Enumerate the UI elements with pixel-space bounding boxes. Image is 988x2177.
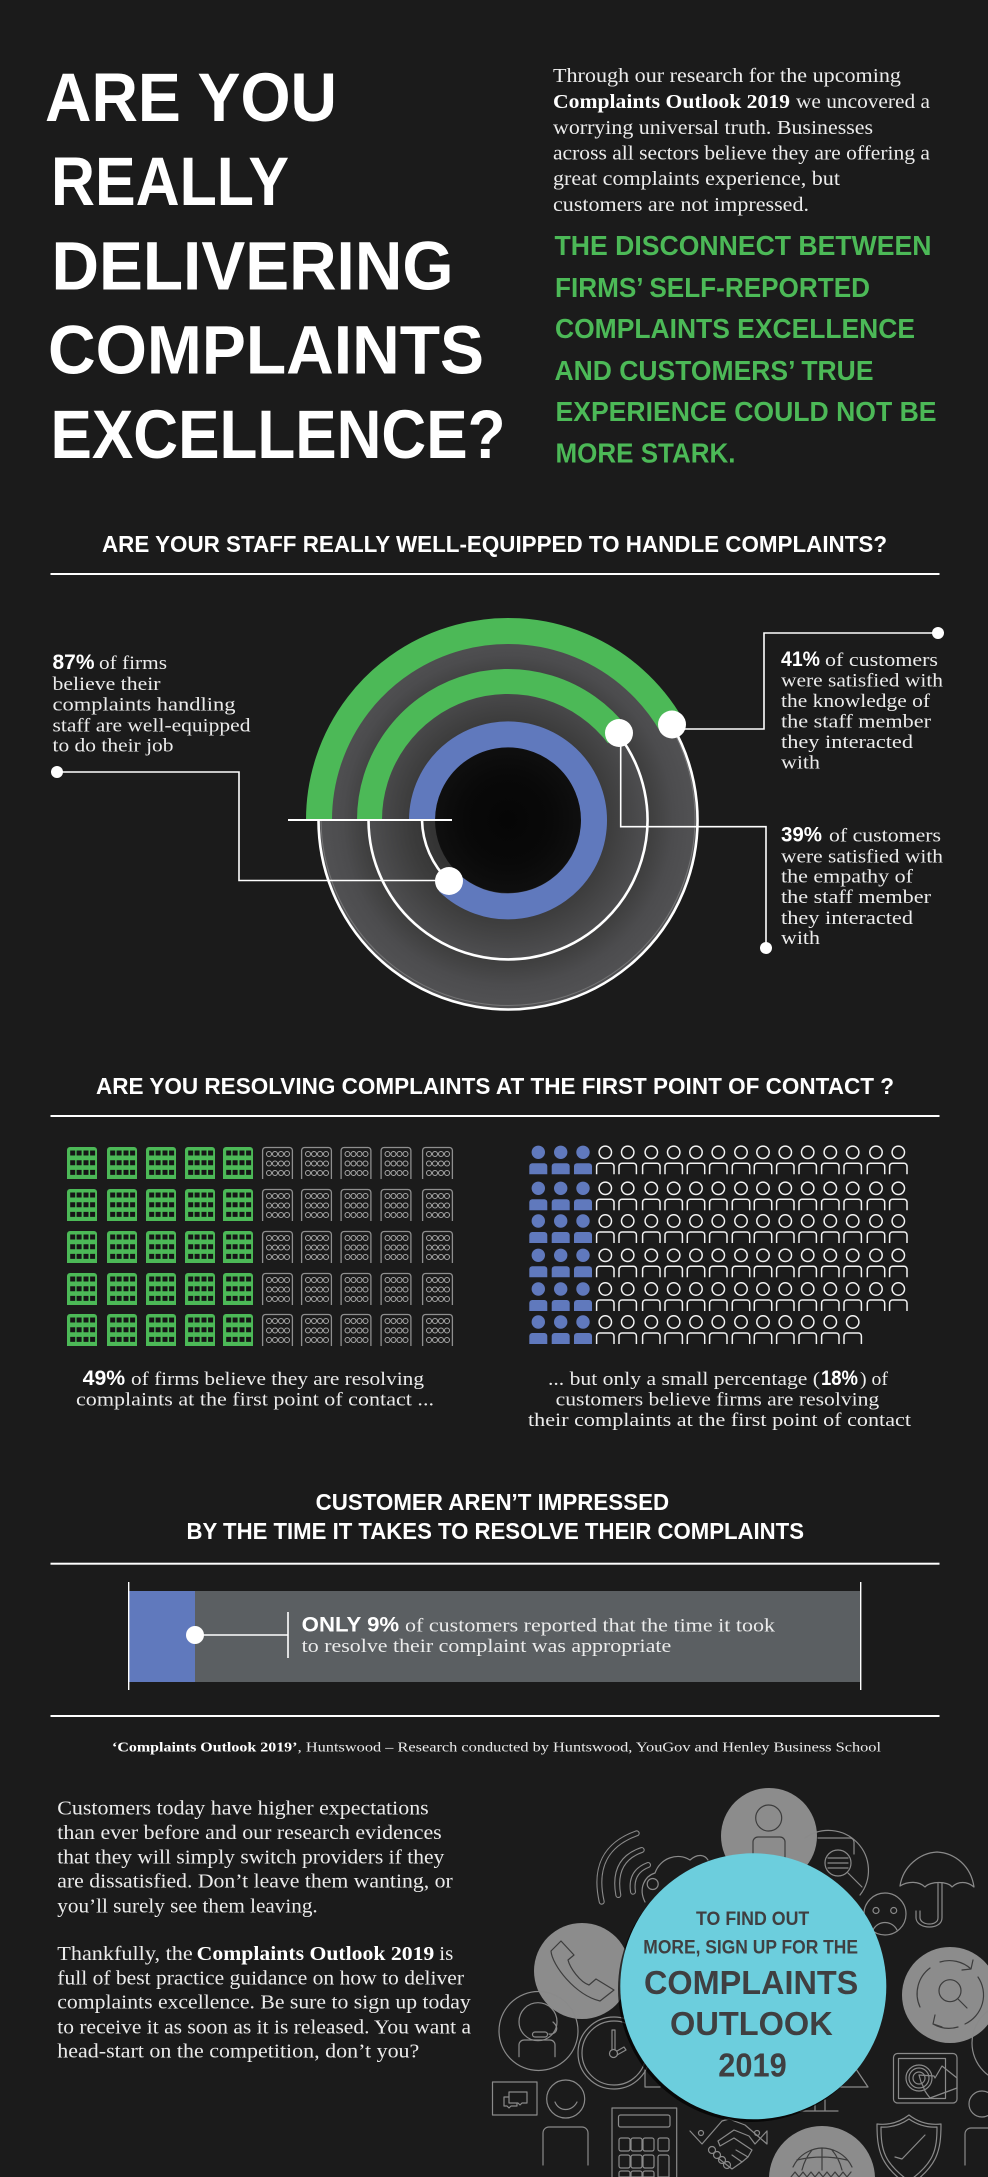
green arc: knowledge 41% bbox=[319, 631, 672, 820]
caption: 49% of firms: of firms believe they are resolving bbox=[131, 1369, 425, 1390]
green buildings bbox=[67, 1147, 253, 1346]
intro paragraph bbox=[553, 65, 930, 216]
icon: clock bbox=[578, 2017, 650, 2089]
icon: globe in gray circle bbox=[769, 2126, 875, 2177]
call to action circle bbox=[618, 1853, 886, 2122]
call to action text: TO FIND OUT bbox=[696, 1909, 810, 1930]
outlined people bbox=[597, 1146, 907, 1344]
callout: 39% of customers: 39% bbox=[781, 824, 822, 847]
baseline bbox=[288, 819, 452, 821]
intro paragraph: Complaints Outlook 2019 bbox=[553, 91, 790, 113]
title: REALLY bbox=[51, 143, 289, 220]
icon: shield bbox=[877, 2115, 941, 2177]
callout: 39% of customers: were satisfied with bbox=[781, 847, 944, 868]
closing text bbox=[57, 1797, 471, 2063]
callout: 41% of customers: the knowledge of bbox=[781, 691, 931, 712]
icon: signal and cloud bbox=[599, 1833, 708, 1902]
bar chart: 9%: to resolve their complaint was appropriate bbox=[302, 1636, 671, 1657]
callout: 41% of customers: were satisfied with bbox=[781, 671, 944, 692]
callout: 87% of firms: 87% bbox=[52, 651, 95, 674]
callout: 87% of firms: to do their job bbox=[52, 736, 174, 757]
title: ARE YOU bbox=[45, 59, 337, 136]
icon: monitor chat bbox=[492, 2082, 537, 2115]
pictogram: people 18% bbox=[529, 1146, 907, 1344]
intro paragraph: worrying universal truth. Businesses bbox=[553, 117, 873, 139]
icon: touch target tablet bbox=[894, 2054, 957, 2103]
caption: 49% of firms: complaints at the first point of contact ... bbox=[76, 1390, 434, 1411]
green arc: empathy 39% bbox=[370, 681, 618, 820]
closing text: Complaints Outlook 2019 bbox=[197, 1943, 434, 1965]
caption: 18% of customers bbox=[528, 1367, 912, 1431]
icon: smiling person bbox=[543, 2080, 588, 2165]
icon: person in gray circle bbox=[721, 1788, 817, 1884]
gray rings bbox=[318, 630, 698, 1010]
green statement bbox=[554, 230, 936, 468]
callout: 41% of customers: of customers bbox=[825, 650, 938, 671]
icon: handshake bbox=[690, 2119, 767, 2169]
icon: monitor behind circle bbox=[645, 2060, 868, 2111]
icon: partial shapes at right edge bbox=[965, 2003, 988, 2165]
green statement: COMPLAINTS EXCELLENCE bbox=[555, 313, 915, 344]
section heading: staff: ARE YOUR STAFF REALLY WELL-EQUIPPED TO HANDLE COMPLAINTS? bbox=[102, 531, 887, 557]
bar track bbox=[128, 1591, 860, 1682]
icon: umbrella bbox=[900, 1852, 974, 1927]
closing text: Customers today have higher expectations bbox=[57, 1797, 429, 1819]
section heading: time to resolve: CUSTOMER AREN’T IMPRESSED bbox=[316, 1489, 669, 1515]
blue people bbox=[529, 1146, 592, 1344]
intro paragraph: great complaints experience, but bbox=[553, 168, 840, 190]
hole bbox=[435, 747, 581, 893]
title: EXCELLENCE? bbox=[50, 396, 506, 473]
green statement: FIRMS’ SELF-REPORTED bbox=[555, 272, 870, 303]
caption: 18% of customers: 18% bbox=[821, 1367, 858, 1390]
intro paragraph: we uncovered a bbox=[796, 91, 930, 113]
bar pointer bbox=[195, 1612, 288, 1658]
callout: 41% of customers: they interacted bbox=[781, 732, 914, 753]
bar fill bbox=[128, 1591, 195, 1682]
icon: sad face bbox=[864, 1893, 906, 1935]
call to action text bbox=[643, 1909, 858, 2084]
callout: 41% of customers bbox=[658, 627, 944, 774]
callout: 41% of customers: the staff member bbox=[781, 712, 932, 733]
icon: document search bbox=[805, 1830, 868, 1895]
callout: 39% of customers: they interacted bbox=[781, 908, 914, 929]
callout: 41% of customers: 41% bbox=[781, 648, 820, 671]
divider and source line bbox=[50, 1715, 940, 1756]
bar text: ONLY 9% bbox=[302, 1612, 399, 1636]
green statement: EXPERIENCE COULD NOT BE bbox=[556, 396, 936, 427]
call to action text: OUTLOOK bbox=[670, 2005, 833, 2042]
icon: calculator bbox=[612, 2108, 677, 2177]
icon: search cycle in gray circle bbox=[902, 1947, 988, 2043]
title: DELIVERING bbox=[52, 228, 454, 304]
green statement: THE DISCONNECT BETWEEN bbox=[554, 230, 932, 261]
bar chart: 9%: of customers reported that the time it took bbox=[405, 1616, 776, 1636]
callout: 87% of firms: believe their bbox=[52, 674, 161, 695]
closing text: that they will simply switch providers if they bbox=[57, 1846, 444, 1868]
callout: 87% of firms bbox=[51, 651, 463, 895]
call to action text: COMPLAINTS bbox=[644, 1964, 858, 2001]
intro paragraph: Through our research for the upcoming bbox=[553, 65, 901, 87]
white arcs bbox=[318, 725, 697, 1009]
closing text: Thankfully, the bbox=[57, 1943, 193, 1965]
closing text: to receive it as soon as it is released. You want a bbox=[57, 2016, 471, 2038]
caption: 18% of customers: ) of bbox=[860, 1369, 889, 1390]
green statement: MORE STARK. bbox=[556, 438, 736, 468]
callout: 39% of customers: the staff member bbox=[781, 887, 932, 908]
donut chart bbox=[288, 630, 698, 1010]
closing text: are dissatisfied. Don’t leave them wanting, or bbox=[57, 1871, 453, 1893]
icon: phone in gray circle bbox=[534, 1923, 630, 2019]
icon cluster bbox=[492, 1788, 988, 2177]
caption: 18% of customers: ... but only a small percentage ( bbox=[548, 1369, 820, 1390]
closing text: than ever before and our research evidences bbox=[57, 1822, 442, 1844]
closing text: is bbox=[439, 1943, 454, 1965]
caption: 49% of firms: 49% bbox=[83, 1367, 126, 1390]
call to action text: MORE, SIGN UP FOR THE bbox=[643, 1937, 858, 1958]
intro paragraph: customers are not impressed. bbox=[553, 194, 809, 216]
pictogram: buildings 49% bbox=[67, 1147, 452, 1346]
callout: 39% of customers: the empathy of bbox=[781, 867, 914, 888]
section heading: time to resolve: BY THE TIME IT TAKES TO RESOLVE THEIR COMPLAINTS bbox=[186, 1518, 804, 1544]
icon: headset agent bbox=[499, 1992, 578, 2070]
callout: 39% of customers: of customers bbox=[829, 826, 941, 847]
closing text: head-start on the competition, don’t you? bbox=[57, 2041, 419, 2063]
callout: 87% of firms: of firms bbox=[99, 653, 167, 674]
closing text: you’ll surely see them leaving. bbox=[57, 1895, 318, 1917]
bar chart: 9% bbox=[128, 1582, 861, 1690]
section heading: time to resolve bbox=[50, 1489, 940, 1565]
closing text: full of best practice guidance on how to deliver bbox=[57, 1967, 464, 1989]
caption: 18% of customers: customers believe firms are resolving bbox=[556, 1390, 880, 1411]
call to action text: 2019 bbox=[718, 2047, 787, 2084]
intro paragraph: across all sectors believe they are offering a bbox=[553, 142, 930, 164]
blue arc: firms 87% bbox=[422, 734, 594, 906]
callout: 39% of customers bbox=[605, 719, 944, 954]
outlined buildings bbox=[263, 1148, 452, 1346]
title: COMPLAINTS bbox=[48, 312, 484, 388]
callout: 41% of customers: with bbox=[781, 753, 821, 774]
callout: 39% of customers: with bbox=[781, 928, 821, 949]
title bbox=[45, 59, 506, 473]
callout: 87% of firms: complaints handling bbox=[52, 695, 236, 716]
caption: 49% of firms bbox=[76, 1367, 434, 1411]
section heading: first point of contact: ARE YOU RESOLVING COMPLAINTS AT THE FIRST POINT OF CONTACT ? bbox=[96, 1073, 894, 1099]
lower rim bbox=[321, 725, 695, 1005]
closing text: complaints excellence. Be sure to sign up today bbox=[57, 1992, 471, 2014]
callout: 87% of firms: staff are well-equipped bbox=[52, 716, 251, 737]
divider and source line: ‘Complaints Outlook 2019’ bbox=[112, 1741, 298, 1756]
caption: 18% of customers: their complaints at the first point of contact bbox=[528, 1410, 912, 1431]
green statement: AND CUSTOMERS’ TRUE bbox=[554, 355, 874, 386]
divider and source line: , Huntswood – Research conducted by Huntswood, YouGov and Henley Business School bbox=[298, 1741, 881, 1756]
